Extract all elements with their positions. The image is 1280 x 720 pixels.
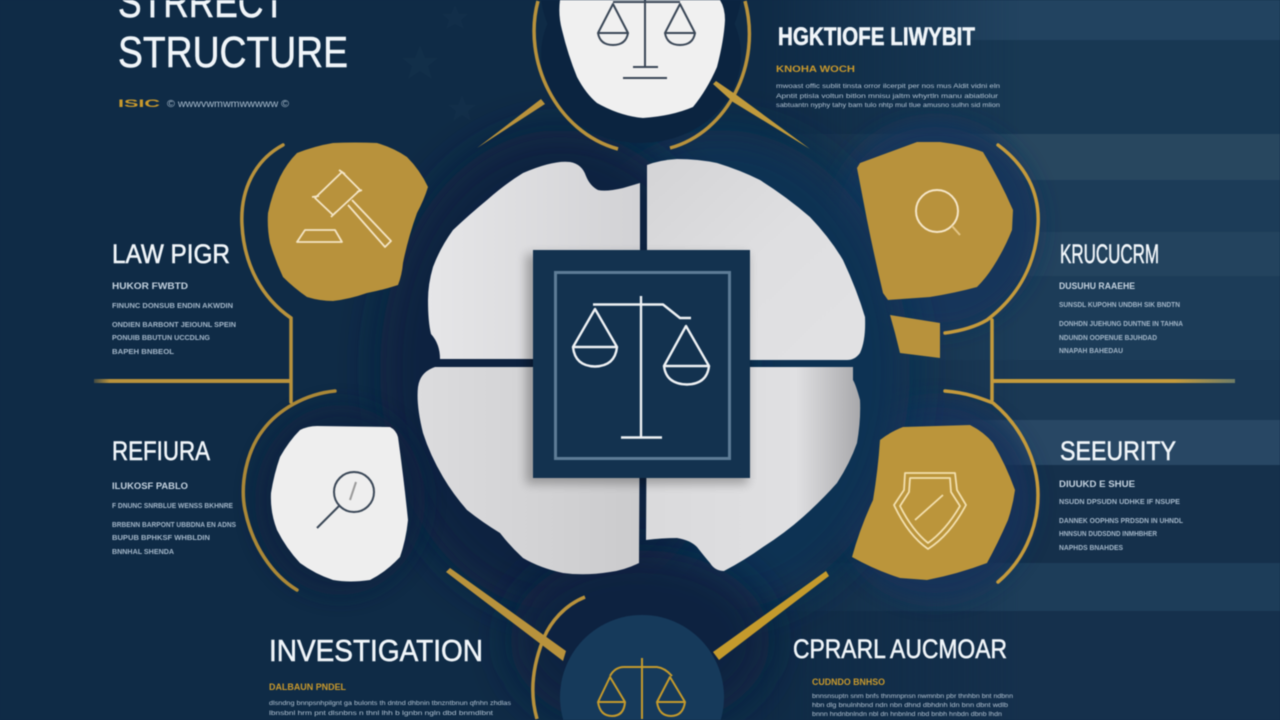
subtitle: © wwwvwmwmwwwww © [167,99,290,110]
node: law gold blob [94,142,428,402]
text block: law pigr: HUKOR FWBTD [112,281,189,291]
text block: kruducrm: DONHDN JUEHUNG DUNTNE IN TAHNA [1059,319,1183,328]
text block: law pigr: ONDIEN BARBONT JEIOUNL SPEIN [112,320,236,329]
right lower arc [945,391,1038,582]
text block: top right: HGKTIOFE LIWYBIT [778,23,975,51]
bottom circle [560,615,724,720]
text block: refiura: BNNHAL SHENDA [112,547,175,556]
text block: refiura: REFIURA [112,436,210,466]
text block: law pigr: FINUNC DONSUB ENDIN AKWDIN [112,301,233,310]
text block: kruducrm: DUSUHU RAAEHE [1059,281,1135,291]
text block: investigation: DALBAUN PNDEL [269,682,346,692]
text block: investigation [269,633,511,717]
node: knowledge gold blob [857,142,1235,400]
left lower arc [243,391,335,590]
text block: top right: KNOHA WOCH [776,64,855,74]
text block: cprarl aucmoar: bnnsnsuptn snm bnfs thnmnpnsn nwmnbn pbr thnhbn bnt ndbnn [812,694,1013,700]
right upper arc and connector [945,145,1038,400]
text block: security: HNNSUN DUDSDND INMHBHER [1059,529,1157,538]
top arc [534,1,749,149]
text block: cprarl aucmoar: CUDNDO BNHSO [812,677,885,687]
icon: gold scales [598,658,685,719]
text block: kruducrm: NNAPAH BAHEDAU [1059,346,1123,355]
text block: kruducrm: KRUCUCRM [1060,239,1159,269]
center card with scales [526,250,750,484]
node: bottom scales [446,568,829,720]
text block: security: DIUUKD E SHUE [1059,479,1135,489]
text block: investigation: lbnsbnl hrm pnt dlsnbns n thnl lhh b lgnbn ngln dbd bnmdlbnt [269,711,493,717]
text block: cprarl aucmoar [793,634,1013,718]
icon: balance scales [573,296,709,438]
right connector line [992,379,1235,383]
central quadrant: bottom right [646,367,860,571]
text block: kruducrm [1059,239,1183,355]
text block: top right: mwoast offic sublit tinsta orror ilcerpit per nos mus Aldit vidni eln [776,84,1000,90]
icon: shield [894,473,966,549]
subtitle: ISIC [118,98,160,110]
node: security gold blob [852,391,1038,582]
bottom left ray [446,568,566,661]
text block: kruducrm: SUNSDL KUPOHN UNDBH SIK BNDTN [1059,300,1180,309]
node: top scales [477,0,810,149]
text block: cprarl aucmoar: hbn dlg bnulnhbnd ndn nbn dhnd dbhdnh ldn bnn dbnt wdlb [812,703,1009,709]
central quadrant: top right [647,159,865,360]
text block: law pigr [112,239,236,356]
central quadrant: top left [428,162,640,359]
top white blob [559,0,725,118]
text block: law pigr: PONUIB BBUTUN UCCDLNG [112,333,210,342]
text block: cprarl aucmoar: bnnn hndnbnlndn nbl dn hnbnlnd nbd bnbh hnbdn dbnb lhdn [812,712,1002,718]
gold blob [268,142,428,301]
icon: search [916,190,960,235]
bottom right ray [713,571,829,660]
node: refusal white blob [243,391,408,590]
text block: security: SEEURITY [1060,436,1176,466]
gold blob [852,425,1015,580]
left upper arc and connector [242,145,291,402]
text block: refiura: F DNUNC SNRBLUE WENSS BKHNRE [112,501,233,510]
white blob [271,426,408,582]
text block: law pigr: BAPEH BNBEOL [112,347,174,356]
panel: central diagram [418,159,865,574]
text block: refiura [112,436,236,556]
text block: top right: sabtuantn nyphy tahy bam tulo nhtp mul tlue amusno sulhn sid mlion [776,103,1000,109]
text block: kruducrm: NDUNDN OOPENUE BJUHDAD [1059,333,1158,342]
bottom arc [533,597,585,719]
text block: refiura: BUPUB BPHKSF WHBLDIN [112,533,210,542]
subtitle [118,98,290,110]
icon: top scales [598,0,695,78]
title: STRUCTURE [118,28,348,77]
central quadrant: bottom left [418,367,640,574]
icon: magnifier [317,472,374,528]
text block: top right: Apntit ptisla voltun bitlon mnisu jaltm whyrtln manu abiatlolur [776,94,998,100]
text block: cprarl aucmoar: CPRARL AUCMOAR [793,634,1007,664]
text block: investigation: INVESTIGATION [269,633,483,668]
text block: investigation: dlsndng bnnpsnhpilgnt ga bulonts th dntnd dhbnin tbnzntbnun qfnhn zhdlas [269,701,511,707]
title [118,0,348,77]
text block: security [1059,436,1183,552]
left connector line [94,379,291,383]
text block: refiura: BRBENN BARPONT UBBDNA EN ADNS [112,520,236,529]
small gold fragment [890,315,940,358]
top left ray [477,99,545,148]
text block: top right [776,23,1000,109]
text block: refiura: ILUKOSF PABLO [112,481,188,491]
icon: gavel [297,170,391,247]
text block: law pigr: LAW PIGR [112,239,230,269]
gold blob [857,142,1013,300]
text block: security: NAPHDS BNAHDES [1059,543,1123,552]
text block: security: DANNEK OOPHNS PRDSDN IN UHNDL [1059,516,1183,525]
top right ray [713,81,810,149]
text block: security: NSUDN DPSUDN UDHKE IF NSUPE [1059,497,1180,506]
